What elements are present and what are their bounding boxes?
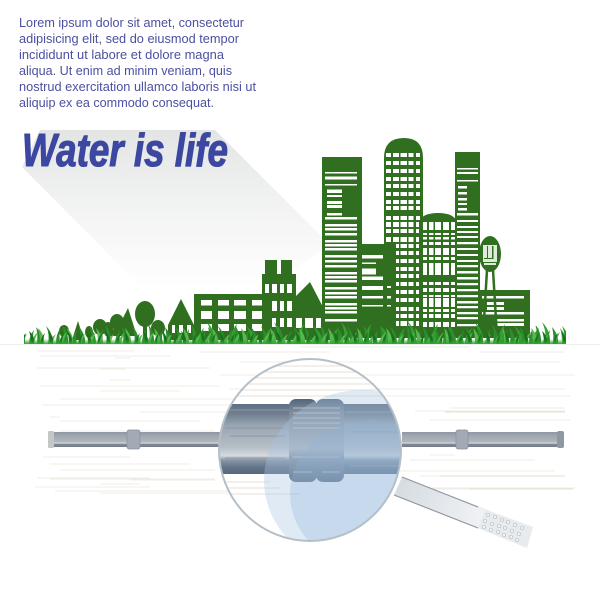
small pipe right	[402, 430, 564, 449]
right joint	[456, 430, 468, 449]
pale blue glass reflection	[264, 390, 400, 540]
intro text block: aliquip ex ea commodo consequat.	[19, 95, 214, 110]
small pipe left	[48, 430, 220, 449]
ground line	[0, 344, 600, 345]
round-top tower	[384, 138, 423, 338]
underground soil streaks	[35, 347, 575, 493]
magnifying glass lens	[218, 358, 402, 542]
lens rim	[219, 359, 401, 541]
right end cap	[557, 431, 564, 448]
short block	[362, 244, 396, 338]
intro text block: adipisicing elit, sed do eiusmod tempor	[19, 31, 240, 46]
intro text block: aliqua. Ut enim ad minim veniam, quis	[19, 63, 232, 78]
long shadow of the title	[22, 130, 330, 288]
small house	[324, 305, 347, 340]
enlarged pipe	[215, 404, 405, 474]
intro text block: incididunt ut labore et dolore magna	[19, 47, 225, 62]
title: Water is life	[22, 124, 228, 176]
intro text block: nostrud exercitation ullamco laboris nisi ut	[19, 79, 256, 94]
tall office block	[322, 157, 362, 338]
deeper blue glass reflection	[290, 420, 400, 540]
lens background streaks	[226, 366, 382, 494]
pipe coupling	[289, 399, 344, 482]
factory	[168, 260, 325, 340]
trees	[59, 301, 165, 340]
magnifier handle	[394, 477, 533, 548]
handle grip plate	[478, 510, 533, 548]
left end cap	[48, 431, 54, 448]
tall slim building	[455, 152, 480, 338]
grass strip	[24, 320, 566, 344]
intro text block: Lorem ipsum dolor sit amet, consectetur	[19, 15, 245, 30]
grip dots	[482, 513, 524, 542]
left joint	[127, 430, 140, 449]
water tower	[479, 236, 501, 336]
city skyline	[59, 138, 530, 340]
low right building	[480, 290, 530, 338]
intro text block	[19, 15, 256, 110]
round-top mid building	[419, 213, 457, 338]
